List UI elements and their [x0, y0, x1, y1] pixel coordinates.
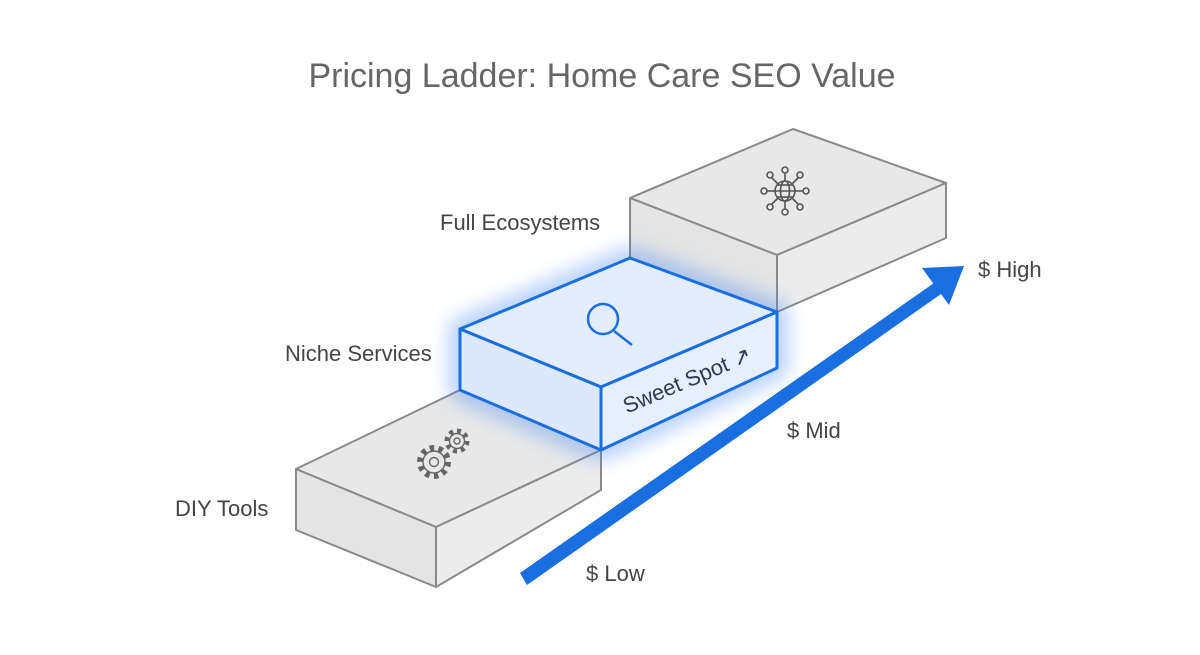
block: DIY tools: [296, 390, 601, 587]
labels: prices: $ Low: [586, 561, 645, 586]
labels: tiers: Full Ecosystems: [440, 210, 600, 235]
labels: prices: [586, 257, 1042, 586]
icon: gears: [420, 431, 467, 476]
labels: tiers: Niche Services: [285, 341, 432, 366]
arrow: price increase: [520, 266, 964, 585]
sweet spot label: Sweet Spot ↗: [619, 342, 755, 418]
labels: prices: $ Mid: [787, 418, 841, 443]
labels: tiers: [175, 210, 600, 521]
block: niche services (sweet spot): [460, 258, 777, 450]
labels: prices: $ High: [978, 257, 1042, 282]
icon: magnifier: [588, 304, 632, 345]
labels: tiers: DIY Tools: [175, 496, 268, 521]
icon: network globe: [761, 167, 809, 215]
block: full ecosystems: [630, 129, 946, 312]
title: Pricing Ladder: Home Care SEO Value: [308, 57, 896, 95]
